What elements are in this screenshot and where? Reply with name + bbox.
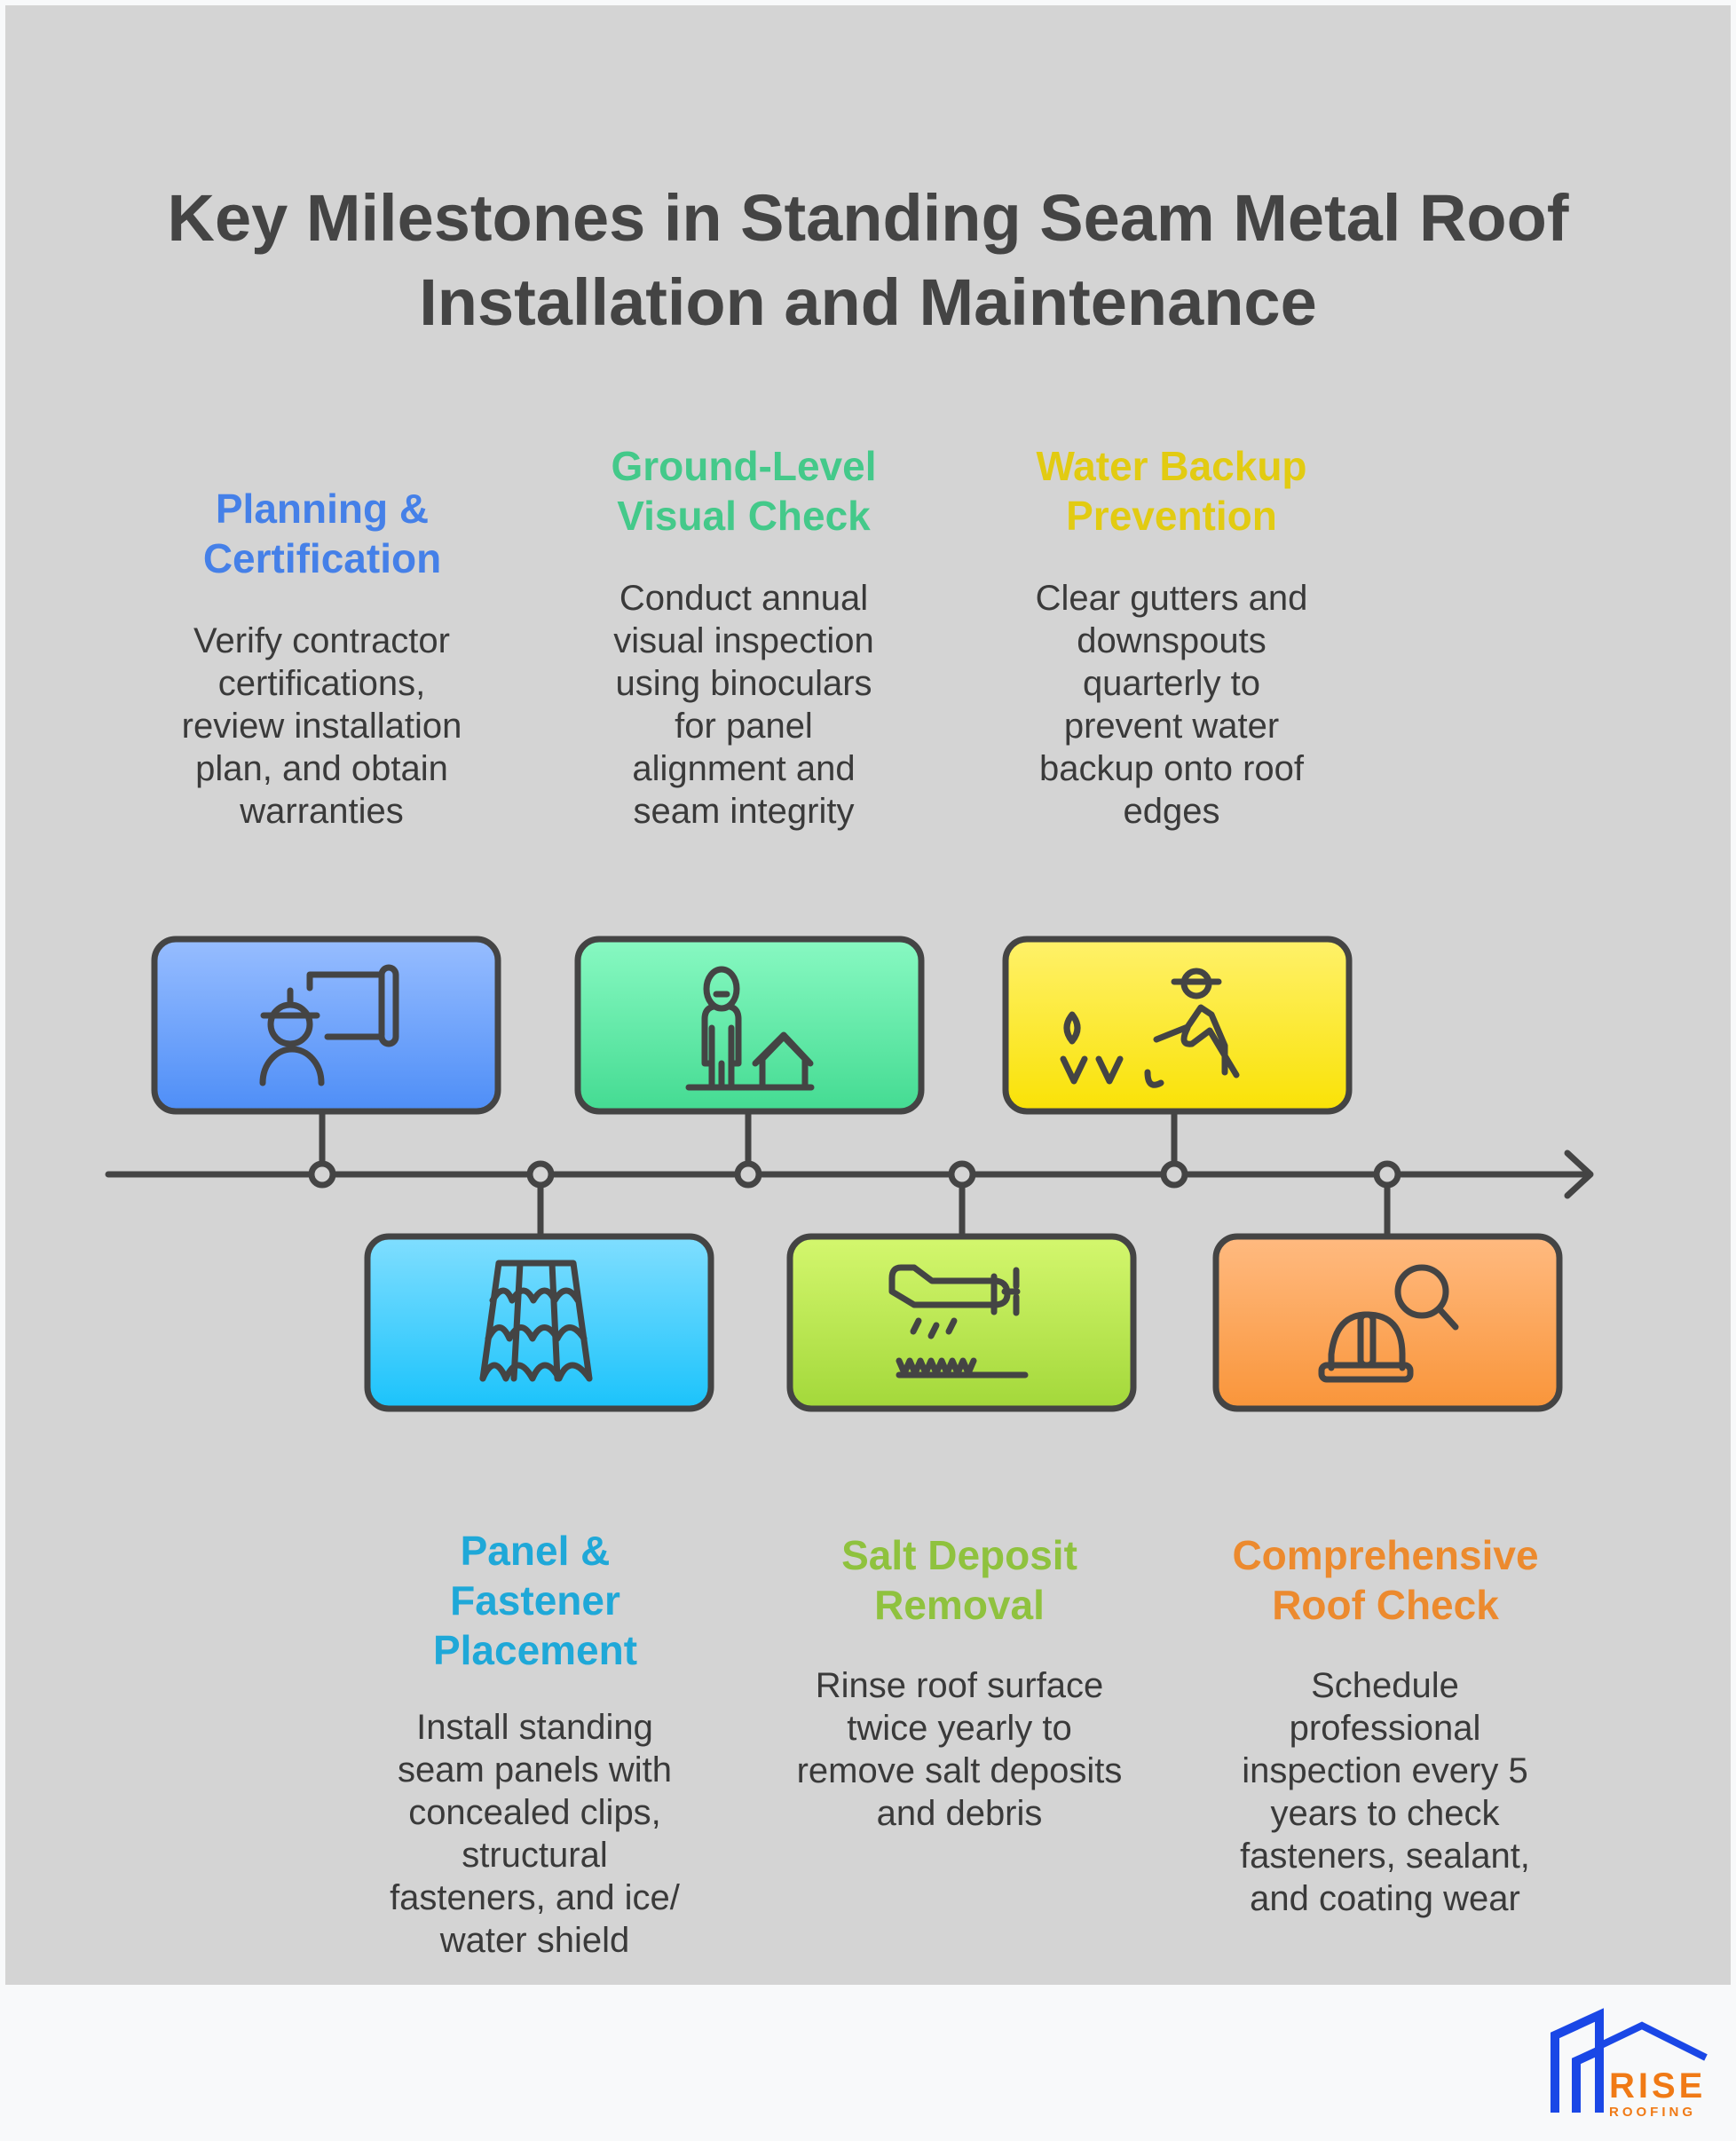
description: Rinse roof surface twice yearly to remove salt deposits and debris (797, 1666, 1122, 1833)
heading (433, 1528, 637, 1673)
text: salt deposit removal (797, 1532, 1122, 1833)
title (168, 181, 1569, 339)
text: water backup prevention (1036, 443, 1307, 831)
title: Key Milestones in Standing Seam Metal Roof (168, 181, 1568, 255)
box: panel and fastener icon roof tiles (367, 1236, 711, 1409)
description: Conduct annual visual inspection using binoculars for panel alignment and seam integrity (613, 579, 874, 831)
heading (1036, 443, 1307, 539)
heading: Roof Check (1272, 1582, 1499, 1628)
heading: Certification (203, 535, 441, 581)
heading: Water Backup (1036, 443, 1307, 489)
heading: Comprehensive (1232, 1532, 1539, 1578)
heading: Ground-Level (611, 443, 877, 489)
logo: rise roofing: ROOFING (1609, 2105, 1696, 2120)
box: salt removal icon crop sprayer (790, 1236, 1133, 1409)
box: comprehensive check icon hard hat magnifier (1216, 1236, 1559, 1409)
heading: Planning & (216, 486, 429, 532)
heading: Fastener (450, 1577, 620, 1624)
heading: Placement (433, 1627, 637, 1673)
text: panel & fastener placement (390, 1528, 680, 1960)
heading (203, 486, 441, 581)
box: water backup icon gardener (1006, 939, 1349, 1111)
timeline axis with arrow (108, 1111, 1590, 1236)
heading (611, 443, 877, 539)
logo: rise roofing: RISE (1609, 2066, 1706, 2105)
heading: Panel & (461, 1528, 610, 1574)
box: ground-level check icon person and house (578, 939, 921, 1111)
text: comprehensive roof check (1232, 1532, 1539, 1918)
logo: rise roofing (1551, 2008, 1708, 2120)
heading: Visual Check (617, 493, 871, 539)
text: ground-level visual check (611, 443, 877, 831)
description: Install standing seam panels with concealed clips, structural fasteners, and ice/ water shield (390, 1708, 680, 1960)
title: Installation and Maintenance (419, 265, 1317, 339)
description: Clear gutters and downspouts quarterly to prevent water backup onto roof edges (1036, 579, 1307, 831)
heading: Removal (874, 1582, 1045, 1628)
box: planning icon engineer (154, 939, 498, 1111)
description: Verify contractor certifications, review installation plan, and obtain warranties (182, 621, 462, 831)
text: planning & certification (182, 486, 462, 831)
description: Schedule professional inspection every 5 years to check fasteners, sealant, and coating wear (1240, 1666, 1530, 1918)
heading: Salt Deposit (841, 1532, 1077, 1578)
heading (841, 1532, 1077, 1628)
heading: Prevention (1066, 493, 1277, 539)
heading (1232, 1532, 1539, 1628)
